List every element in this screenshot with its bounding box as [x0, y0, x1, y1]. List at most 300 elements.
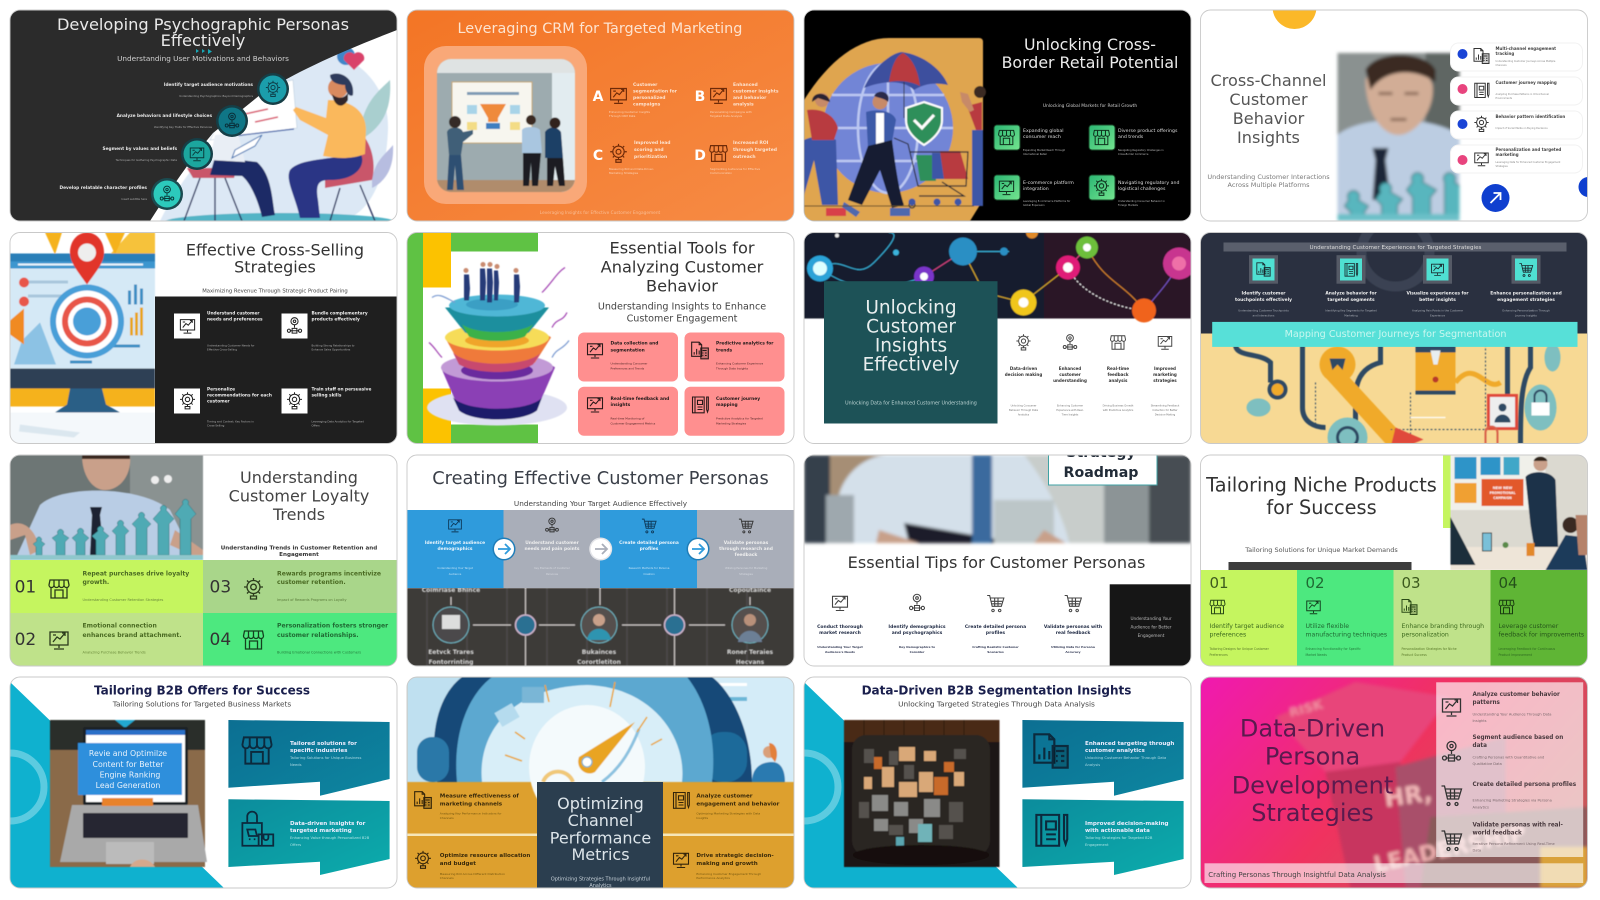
step 1: touchpoints effectively	[1235, 297, 1292, 303]
card 1: Channels	[1496, 64, 1507, 67]
card 2: Environments	[1496, 97, 1513, 100]
callout 2: Engagement	[1085, 843, 1109, 847]
metric 4	[674, 853, 774, 880]
card 2: Enhancing Customer Experience	[716, 362, 763, 366]
subtitle band: Crafting Personas Through Insightful Data Analysis	[1208, 871, 1386, 879]
subtitle: Maximizing Revenue Through Strategic Product Pairing	[202, 288, 348, 294]
step 2: Identifying Key Traits for Effective Personas	[154, 125, 213, 129]
benefit 4: strategies	[1153, 378, 1177, 383]
title: Data-Driven	[1240, 715, 1385, 743]
photo: presenter with campaign board: NEW NEW	[1493, 486, 1512, 490]
column 03: Personalization Strategies for Niche	[1402, 647, 1457, 651]
tip 3: Timing and Context: Key Factors in	[206, 420, 254, 424]
metric 4: Performance Analytics	[696, 876, 730, 880]
subtitle: Unlocking Global Markets for Retail Growth	[1043, 103, 1137, 109]
tip 1: market research	[819, 630, 861, 636]
step 1	[425, 520, 485, 576]
feature 1	[994, 125, 1066, 156]
step 4: Strategies	[739, 572, 753, 576]
item D: Increased ROI	[733, 140, 769, 146]
column 04: Product Improvement	[1498, 653, 1533, 657]
benefit 4: Improved	[1154, 366, 1176, 371]
card 1: Understanding Consumer	[610, 362, 648, 366]
step 4: through research and	[719, 546, 773, 552]
panel: Leveraging CRM	[407, 10, 794, 221]
roadmap sign: Roadmap	[1064, 465, 1138, 481]
item C: C	[593, 148, 603, 164]
benefit 4: Streamlining Feedback	[1151, 404, 1180, 408]
title: Insights	[875, 336, 947, 356]
step 1: Understanding Psychographics: Beyond Demographics	[179, 94, 254, 98]
item B: B	[695, 89, 705, 105]
callout 2: Tailoring Strategies for Targeted B2B	[1084, 836, 1153, 840]
card 3	[578, 387, 678, 436]
metric 2: Measuring ROI Across Different Distribution	[440, 872, 505, 876]
tip 2: Bundle complementary	[312, 310, 368, 316]
item A: Enhancing Customer Insights	[609, 110, 651, 114]
step 2: Analyze behaviors and lifestyle choices	[117, 113, 212, 119]
process blocks	[407, 510, 794, 588]
tip 3: profiles	[986, 630, 1005, 636]
step 4: Journey Insights	[1514, 314, 1537, 318]
panel: B2B Offers	[0, 677, 397, 888]
column 03: Product Success	[1402, 653, 1427, 657]
icon: step marker arrows	[196, 49, 212, 54]
title: Performance	[550, 828, 651, 847]
metric 1: Measure effectiveness of	[440, 794, 519, 800]
item A: segmentation for	[633, 88, 678, 94]
card 3: insights	[610, 402, 631, 408]
title: Behavior	[1233, 109, 1305, 128]
tip 1: Conduct thorough	[817, 624, 863, 630]
item C: prioritization	[634, 154, 667, 160]
panel: Tools for Analyzing Behavior	[407, 232, 794, 444]
card 2: trends	[716, 348, 733, 354]
title: Essential Tools for	[610, 238, 755, 258]
item C: scoring and	[634, 147, 664, 153]
card 2: Through Data Insights	[715, 366, 749, 370]
column 02: Market Needs	[1306, 653, 1327, 657]
subtitle: Understanding Trends in Customer Retention and	[221, 546, 377, 552]
benefit 3: feedback	[1107, 372, 1129, 377]
dark bar	[1228, 562, 1412, 570]
step 1: Understanding Your Target	[437, 566, 473, 570]
panel: Channel Performance	[407, 677, 794, 889]
step 4: Develop relatable character profiles	[60, 185, 147, 191]
tip 2	[282, 310, 368, 352]
step 4	[60, 178, 183, 210]
subtitle: Understanding User Motivations and Behaviors	[117, 54, 289, 63]
tip 1: Audience's Needs	[825, 650, 855, 654]
step 1	[164, 73, 289, 105]
cell 04: Personalization fosters stronger	[277, 623, 388, 630]
tip 1: Effective Cross-Selling	[207, 348, 237, 352]
callout 1	[228, 720, 390, 796]
step 1: Audience	[449, 572, 462, 576]
centre panel	[537, 782, 663, 888]
title: for Success	[1266, 496, 1377, 519]
column 02: Enhancing Functionality for Specific	[1306, 647, 1361, 651]
cell 03: 03	[210, 578, 231, 598]
subtitle: Understanding Customer Interactions	[1207, 173, 1330, 181]
step 2	[117, 105, 248, 137]
tip 1: needs and preferences	[207, 316, 263, 322]
card 1	[578, 332, 678, 382]
item 2: data	[1472, 743, 1487, 749]
step 3: Create detailed persona	[619, 540, 679, 546]
item 3	[1442, 782, 1577, 809]
feature 2: and trends	[1118, 134, 1144, 140]
card 2	[1450, 77, 1582, 105]
cyan diagonal background	[0, 682, 224, 888]
step 3: Analyzing Pain Points in the Customer	[1412, 308, 1464, 312]
tip 4	[282, 386, 371, 428]
card 4: Customer journey	[716, 396, 760, 402]
step 2	[525, 518, 580, 576]
feature 2	[1089, 125, 1178, 156]
benefit 3: analysis	[1109, 378, 1128, 383]
card 2: Analyzing Purchase Patterns in Omnichannel	[1496, 93, 1549, 96]
tip 1	[174, 310, 263, 352]
column 02	[1297, 570, 1394, 666]
roadmap sign	[1048, 445, 1157, 485]
footer text: Leveraging Insights for Effective Customer Engagement	[540, 210, 661, 216]
item 1: patterns	[1472, 700, 1501, 706]
step 1: demographics	[438, 546, 473, 552]
step 2: Analyze behavior for	[1325, 290, 1377, 296]
step 2: targeted segments	[1327, 297, 1375, 303]
item B: Targeted Data Analysis	[709, 114, 743, 118]
photo: letter blocks overlay	[1276, 682, 1588, 888]
callout 1: specific industries	[290, 748, 348, 754]
title: Persona	[1265, 742, 1360, 770]
tip 3: Crafting Realistic Customer	[972, 645, 1019, 649]
cell 01	[10, 560, 203, 613]
tip 4: selling skills	[312, 392, 342, 398]
panel: Mapping Customer Journeys	[1200, 218, 1588, 458]
title: Behavior	[646, 276, 718, 296]
step 1: Identify target audience	[425, 540, 485, 546]
title: Understanding	[240, 468, 358, 487]
photo labels: Copoutaince	[729, 587, 771, 594]
feature 4: Understanding Consumer Behavior in	[1118, 199, 1165, 203]
card 4: Personalization and targeted	[1496, 147, 1561, 152]
feature 4: logistical challenges	[1118, 186, 1166, 192]
subtitle: Engagement	[279, 552, 319, 558]
item A: Through CRM Data	[608, 114, 636, 118]
title: Tailoring Niche Products	[1205, 474, 1437, 497]
photo: presenter with campaign board: PROMOTIONAL	[1490, 491, 1515, 495]
card 1	[1450, 43, 1582, 71]
feature 1: Expanding Market Reach Through	[1023, 148, 1066, 152]
step 3: Experience	[1430, 314, 1445, 318]
card 1: Preferences and Trends	[610, 366, 645, 370]
callout 1: Needs	[290, 763, 302, 767]
metric 4: Drive strategic decision-	[696, 853, 774, 859]
item 4	[1442, 822, 1563, 853]
column 04: 04	[1498, 574, 1518, 592]
cell 02: Analyzing Purchase Behavior Trends	[82, 651, 146, 655]
step 4: Enhance personalization and	[1490, 290, 1562, 296]
item 2: Segment audience based on	[1472, 735, 1563, 741]
metric 4: making and growth	[696, 861, 758, 867]
photo labels: Eetvck Trares	[428, 649, 474, 656]
tip 4: Validate personas with	[1044, 624, 1102, 630]
arrow 2	[589, 538, 612, 560]
photo labels: Coimriase Bhince	[422, 587, 480, 594]
step 3: Techniques for Gathering Psychographic Data	[115, 158, 177, 162]
subtitle: Tailoring Solutions for Targeted Business Markets	[112, 700, 291, 708]
step 2: Identifying Key Segments for Targeted	[1325, 308, 1377, 312]
title: Customer	[1229, 90, 1308, 109]
column 02: 02	[1306, 574, 1325, 592]
metric 3: Analyze customer	[696, 794, 753, 800]
title: Developing Psychographic Personas	[57, 15, 349, 34]
callout 2: Data-driven insights for	[290, 821, 366, 827]
item C: Improved lead	[634, 140, 671, 146]
callout 1: customer analytics	[1085, 748, 1145, 754]
tip 2: Enhance Sales Opportunities	[312, 348, 351, 352]
feature 4: Navigating regulatory and	[1118, 180, 1179, 186]
photo: network diagram	[407, 588, 794, 666]
tip 1	[817, 596, 863, 654]
feature 4: Foreign Markets	[1118, 203, 1139, 207]
callout 1: Unlocking Customer Behavior Through Data	[1085, 756, 1166, 760]
step 4: Insert subtitle here	[121, 197, 147, 201]
title: Insights	[1237, 128, 1300, 147]
benefit 1: Data-driven	[1010, 366, 1037, 371]
black box: Audience for Better	[1131, 625, 1172, 630]
item B	[695, 82, 779, 118]
item C: Measuring ROI and Data-Driven	[609, 167, 654, 171]
title: Cross-Channel	[1210, 71, 1326, 90]
benefit 2: Experience with Real-	[1056, 408, 1084, 412]
item D: Segmenting Audiences for Effective	[710, 167, 760, 171]
arrow 3	[686, 538, 710, 560]
step 3: profiles	[640, 546, 659, 552]
cell 04: 04	[210, 630, 231, 650]
step 2: Marketing	[1344, 314, 1358, 318]
feature 2: Diverse product offerings	[1118, 128, 1178, 134]
item D: Communication	[710, 171, 732, 175]
subtitle: Unlocking Data for Enhanced Customer Understanding	[845, 400, 977, 406]
step 1: Identify target audience motivations	[164, 82, 253, 88]
benefit 4: marketing	[1153, 372, 1177, 377]
subtitle: Unlocking Targeted Strategies Through Data Analysis	[898, 700, 1095, 708]
column 04: Leveraging Feedback for Continuous	[1498, 647, 1556, 651]
item 3: Create detailed persona profiles	[1472, 782, 1577, 788]
tip 4	[1044, 596, 1102, 654]
title: Analyzing Customer	[601, 258, 764, 276]
item A	[593, 82, 678, 118]
black box: Engagement	[1138, 633, 1165, 638]
tip 1: Understanding Customer Needs for	[207, 344, 255, 348]
card 1: Data collection and	[610, 340, 658, 346]
column 01: Preferences	[1210, 653, 1228, 657]
metric 2: and budget	[440, 861, 476, 867]
column 01	[1200, 570, 1297, 666]
title band	[1212, 322, 1578, 347]
tip 3	[965, 596, 1026, 654]
tip 2: Consider	[910, 650, 925, 654]
green accent strip	[1443, 455, 1451, 528]
cell 03	[203, 560, 397, 613]
item A: A	[593, 89, 604, 105]
photo: man with figures	[1338, 53, 1464, 221]
card 4: Marketing Strategies	[716, 422, 747, 426]
panel: Customer Personas	[407, 455, 794, 666]
subtitle: Analytics	[589, 883, 612, 889]
item D: D	[694, 148, 706, 164]
item 1: Insights	[1472, 719, 1487, 723]
benefit 4: Collection for Better	[1152, 408, 1179, 412]
panel: Persona Development	[1200, 677, 1588, 888]
title: Metrics	[571, 845, 630, 864]
item 4: Iterative Persona Refinement Using Real-Time	[1472, 842, 1556, 846]
black box	[1110, 584, 1191, 666]
item B: Enhanced	[733, 82, 758, 88]
title: Unlocking	[865, 298, 957, 318]
column 03: 03	[1402, 574, 1421, 592]
feature 3: Leveraging E-commerce Platforms for	[1023, 199, 1071, 203]
step 3: Research Methods for Persona	[629, 566, 670, 570]
benefit 2: Enhanced	[1059, 366, 1081, 371]
top subtitle band: Understanding Customer Experiences for Targeted Strategies	[1310, 245, 1482, 251]
card 4: Strategies	[1496, 165, 1508, 168]
tip 3: Cross-Selling	[207, 424, 225, 428]
title: Channel	[568, 811, 633, 830]
dark panel	[155, 296, 397, 444]
photo: businessman and roadmap sign	[804, 455, 1191, 543]
cyan diagonal background	[770, 682, 1018, 888]
step 4: Enhancing Personalization Through	[1502, 308, 1550, 312]
item A: Customer	[633, 82, 658, 88]
title: Customer Loyalty	[229, 487, 369, 506]
step 1: Understanding Customer Touchpoints	[1238, 308, 1289, 312]
benefit 4: Decision-Making	[1155, 412, 1176, 416]
photo frame	[424, 46, 587, 204]
step 4: Utilizing Personas for Marketing	[725, 566, 768, 570]
card 4: marketing	[1496, 152, 1519, 157]
step 1: Identify customer	[1242, 290, 1286, 296]
panel: Cross-Channel Behavior	[1200, 0, 1598, 221]
item A: personalized	[633, 95, 665, 101]
photo: presenter with campaign board	[1450, 455, 1588, 570]
item 3: Enhancing Marketing Strategies via Persona	[1472, 799, 1552, 803]
card 3: Real-time feedback and	[610, 396, 669, 402]
column 02: Utilize flexible	[1306, 623, 1349, 630]
feature 3: E-commerce platform	[1023, 180, 1074, 186]
title: Effectively	[863, 354, 959, 376]
cell 01: Repeat purchases drive loyalty	[82, 571, 189, 578]
card 2: Predictive analytics for	[716, 340, 774, 346]
feature 4	[1089, 175, 1179, 207]
benefit 2: customer	[1059, 372, 1081, 377]
cell 04: Building Emotional Connections with Customers	[277, 651, 361, 655]
tip 2: and psychographics	[892, 630, 943, 636]
metric 3: Optimizing Marketing Strategies with Data	[696, 811, 760, 815]
title: Customer	[866, 316, 956, 338]
translucent list panel	[1436, 682, 1583, 857]
title: Unlocking Cross-	[1024, 35, 1156, 54]
metric 1: marketing channels	[440, 802, 503, 808]
cell 02: enhances brand attachment.	[82, 632, 182, 639]
item 2	[1442, 735, 1563, 766]
step 4	[1490, 255, 1562, 318]
tip 2	[888, 594, 946, 654]
metric 2	[415, 851, 530, 880]
benefit 3	[1103, 336, 1134, 412]
panel: Cross-Selling Strategies	[10, 232, 397, 444]
callout 2	[1022, 799, 1184, 875]
step 3: Segment by values and beliefs	[103, 146, 177, 152]
decorative yellow circle	[1272, 10, 1316, 29]
panel: Unlocking Customer Insights	[804, 226, 1195, 444]
item 3: Analytics	[1472, 805, 1489, 809]
laptop screen text: Engine Ranking	[100, 771, 160, 780]
callout 1: Tailoring Solutions for Unique Business	[289, 756, 361, 760]
tip 2: Key Demographics to	[899, 645, 935, 649]
decorative blue half circle	[1578, 177, 1588, 197]
dark diagonal background	[10, 10, 397, 221]
panel: Customer Loyalty Trends	[10, 455, 397, 666]
tip 3: Scenarios	[987, 650, 1004, 654]
panel: Tips for Personas	[804, 445, 1191, 666]
panel: B2B Segmentation	[770, 677, 1191, 888]
tip 3: Personalize	[207, 386, 235, 392]
title band: Mapping Customer Journeys for Segmentation	[1285, 329, 1506, 340]
photo labels: Bukainces	[582, 649, 617, 656]
illustration: layered funnel with people	[427, 262, 569, 426]
laptop screen text: Content for Better	[93, 760, 164, 769]
card 3: Behavior pattern identification	[1496, 114, 1565, 119]
tip 1: Understand customer	[207, 310, 260, 316]
illustration: circuit network	[804, 226, 1195, 322]
card 3	[1450, 111, 1582, 139]
benefit 4	[1151, 336, 1180, 416]
black box: Understanding Your	[1130, 616, 1172, 621]
step 4: engagement strategies	[1497, 297, 1555, 303]
illustration: monitor with target	[10, 232, 155, 444]
feature 1: International Retail	[1023, 152, 1047, 156]
item B: Personalizing Campaigns with	[710, 110, 752, 114]
step 1	[1235, 255, 1292, 318]
photo: letter blocks overlay: RISK	[1288, 697, 1326, 721]
subtitle band	[1204, 863, 1583, 883]
illustration: gauge dial	[407, 677, 794, 829]
column 01: Tailoring Designs for Unique Customer	[1208, 647, 1270, 651]
feature 2: Cross-Border Commerce	[1118, 152, 1149, 156]
card 4: Predictive Analytics for Targeted	[716, 416, 763, 420]
metric 1	[415, 792, 519, 820]
cell 04	[203, 613, 397, 666]
title: Effective Cross-Selling	[186, 240, 364, 260]
title: Optimizing	[557, 794, 644, 813]
feature 1: Expanding global	[1023, 128, 1064, 134]
callout 1: Analysis	[1085, 763, 1100, 767]
item B: analysis	[733, 102, 754, 108]
photo labels: Roner Teraies	[727, 649, 774, 656]
cell 01: Understanding Customer Retention Strategies	[82, 598, 164, 602]
column 03: personalization	[1402, 632, 1449, 639]
title: Strategies	[234, 258, 316, 276]
benefit 2: understanding	[1053, 378, 1087, 383]
card 2	[684, 332, 784, 382]
callout 2: Enhancing Value through Personalized B2B	[290, 836, 370, 840]
metric 4: Enhancing Customer Engagement Through	[696, 872, 761, 876]
illustration: shoppers, globe and umbrella	[804, 38, 986, 221]
title: Trends	[272, 505, 325, 524]
